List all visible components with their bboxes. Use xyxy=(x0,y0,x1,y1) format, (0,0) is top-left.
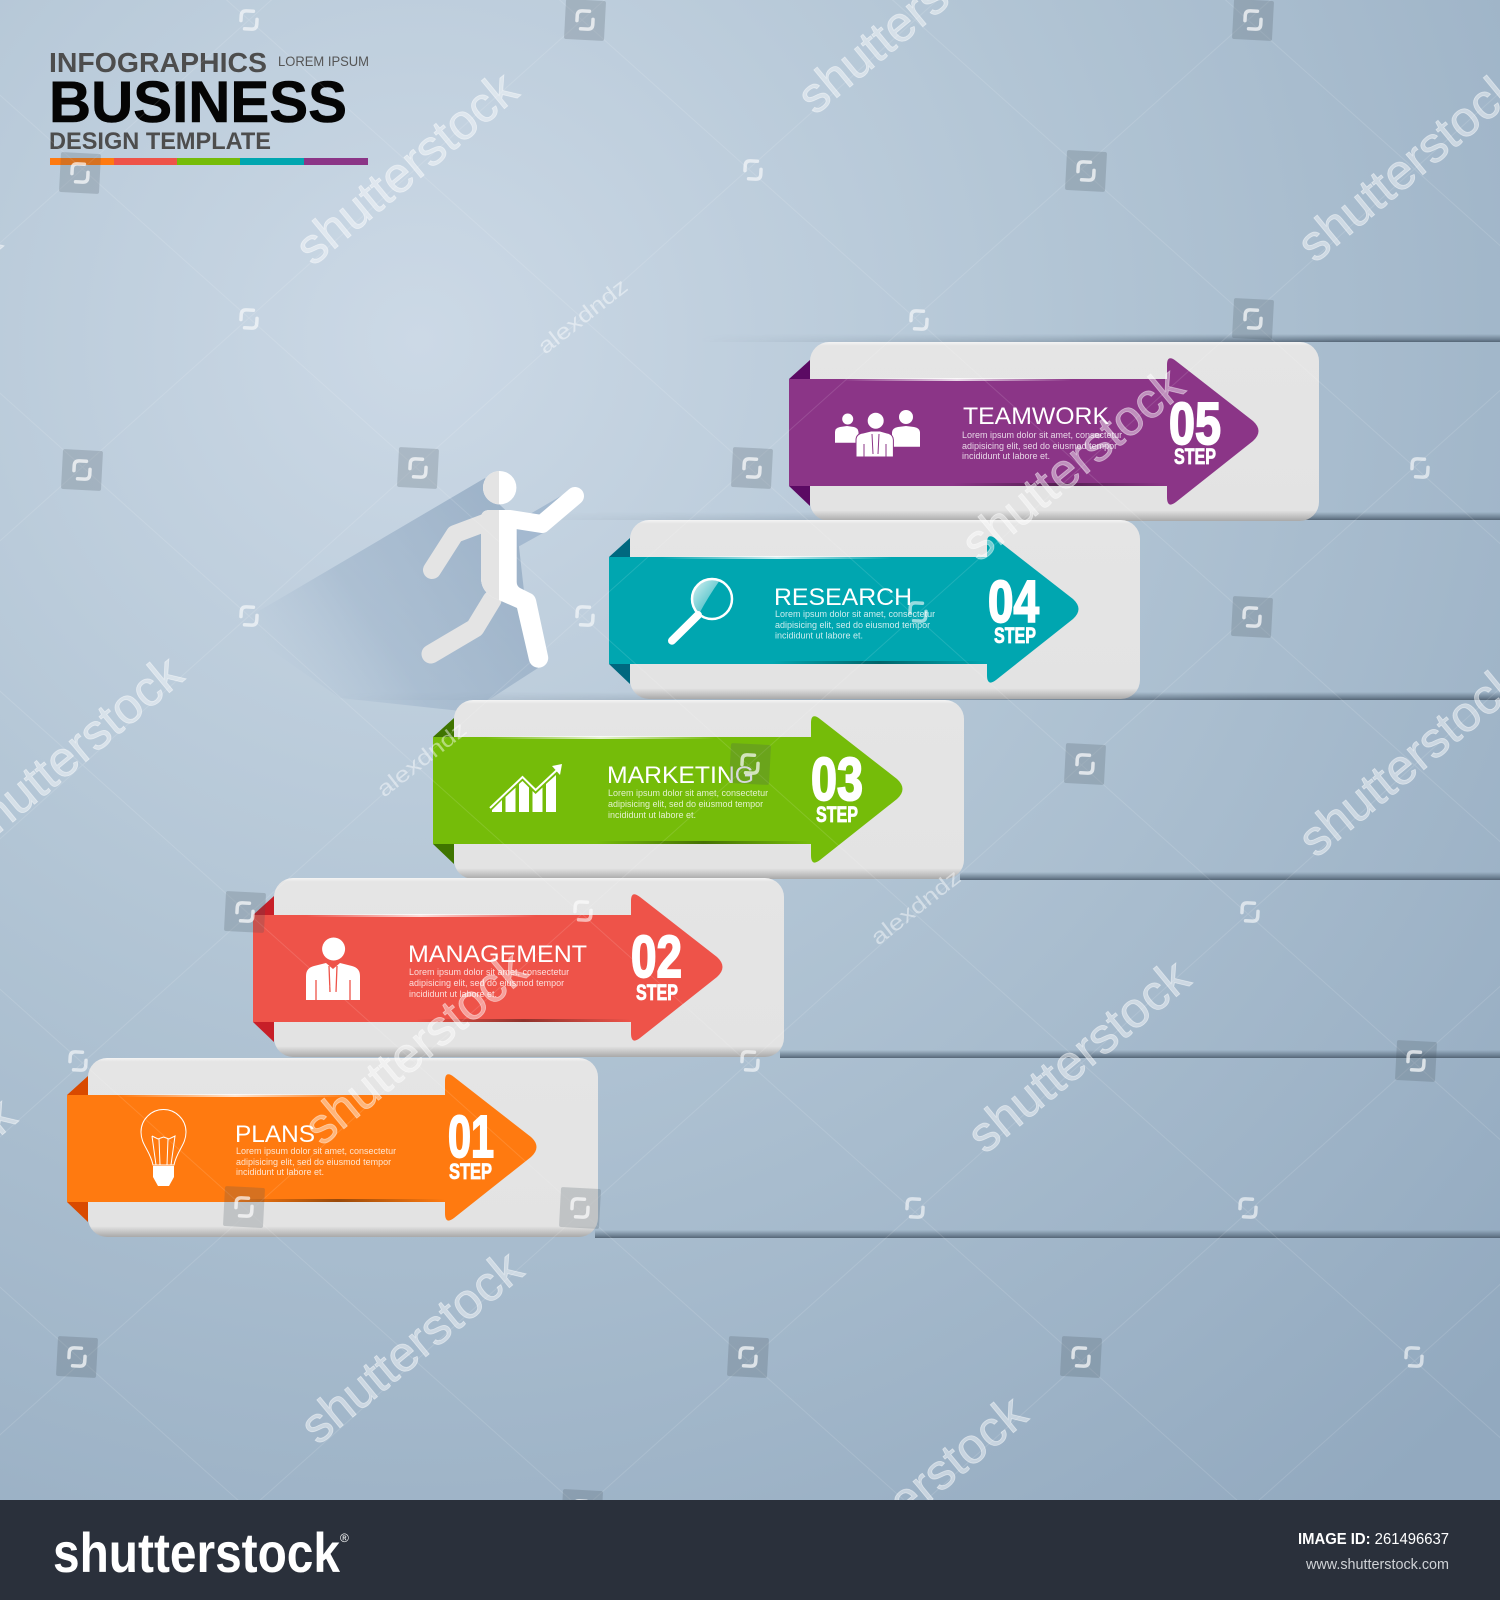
step 04 research xyxy=(609,520,1140,699)
colour bar xyxy=(50,158,368,165)
step label: STEP xyxy=(994,623,1036,648)
body text: incididunt ut labore et. xyxy=(608,810,696,820)
body text: Lorem ipsum dolor sit amet, consectetur xyxy=(962,430,1122,440)
title: PLANS xyxy=(235,1121,315,1148)
body text: Lorem ipsum dolor sit amet, consectetur xyxy=(775,609,935,619)
body text: incididunt ut labore et. xyxy=(236,1167,324,1177)
body text: Lorem ipsum dolor sit amet, consectetur xyxy=(236,1146,396,1156)
number: 05 xyxy=(1169,391,1221,457)
ribbon folds xyxy=(609,538,630,684)
header title block xyxy=(49,47,369,165)
number: 01 xyxy=(448,1104,494,1170)
step label: STEP xyxy=(816,802,858,827)
arrow xyxy=(67,1074,536,1221)
card xyxy=(274,878,784,1057)
body text: adipisicing elit, sed do eiusmod tempor xyxy=(775,620,930,630)
footer logo: shutterstock xyxy=(53,1521,341,1584)
watermark text: shutterstock xyxy=(793,1384,1038,1599)
card xyxy=(810,342,1319,521)
number: 03 xyxy=(811,746,863,813)
title: RESEARCH xyxy=(774,584,912,611)
ribbon folds xyxy=(789,360,810,506)
watermark text: shutterstock xyxy=(284,60,529,275)
card xyxy=(630,520,1140,699)
image id: IMAGE ID: 261496637 xyxy=(1298,1531,1449,1548)
arrow xyxy=(609,536,1078,683)
heading: business: BUSINESS xyxy=(49,70,347,135)
body text: Lorem ipsum dolor sit amet, consectetur xyxy=(409,967,569,977)
body text: adipisicing elit, sed do eiusmod tempor xyxy=(608,799,763,809)
title: MANAGEMENT xyxy=(408,941,587,968)
step label: STEP xyxy=(636,980,678,1005)
icon: manager xyxy=(306,938,360,1000)
icon: light bulb xyxy=(141,1110,186,1186)
body text: adipisicing elit, sed do eiusmod tempor xyxy=(409,978,564,988)
website: www.shutterstock.com xyxy=(1305,1556,1449,1573)
author watermark text xyxy=(372,273,965,950)
card xyxy=(88,1058,598,1237)
footer bar xyxy=(0,1500,1500,1600)
watermark text: shutterstock xyxy=(956,948,1201,1163)
ribbon folds xyxy=(253,896,274,1042)
step 03 marketing xyxy=(433,700,964,879)
number: 02 xyxy=(631,924,682,990)
body text: incididunt ut labore et. xyxy=(409,989,497,999)
watermark text: shutterstock xyxy=(950,356,1195,571)
author watermark text: alexdndz xyxy=(372,716,471,802)
author watermark text: alexdndz xyxy=(866,864,965,950)
body text: adipisicing elit, sed do eiusmod tempor xyxy=(962,441,1117,451)
icon: magnifier xyxy=(672,579,732,641)
step 02 management xyxy=(253,878,784,1057)
step 01 plans xyxy=(67,1058,598,1237)
watermark text: shutterstock xyxy=(289,1239,534,1454)
figure long shadow xyxy=(235,478,566,712)
heading: infographics: INFOGRAPHICS xyxy=(49,47,267,78)
ribbon folds xyxy=(67,1076,88,1222)
card xyxy=(454,700,964,879)
body text: Lorem ipsum dolor sit amet, consectetur xyxy=(608,788,768,798)
watermark bare hooks xyxy=(70,11,1428,1366)
title: TEAMWORK xyxy=(963,403,1109,430)
footer registered mark: ® xyxy=(340,1531,349,1545)
arrow xyxy=(789,358,1258,505)
number: 04 xyxy=(988,569,1039,635)
figure body xyxy=(431,471,575,668)
icon: growth chart xyxy=(490,764,562,812)
step label: STEP xyxy=(1174,444,1216,469)
ribbon folds xyxy=(433,718,454,864)
running figure xyxy=(288,471,584,710)
heading: design template: DESIGN TEMPLATE xyxy=(49,128,271,155)
arrow xyxy=(433,716,902,863)
watermark text: shutterstock xyxy=(293,940,538,1155)
heading: lorem ipsum: LOREM IPSUM xyxy=(278,53,369,69)
step 05 teamwork xyxy=(789,342,1319,521)
body text: incididunt ut labore et. xyxy=(962,451,1050,461)
stair shelf shadow lines xyxy=(489,334,1500,1238)
step label: STEP xyxy=(449,1159,492,1184)
body text: adipisicing elit, sed do eiusmod tempor xyxy=(236,1157,391,1167)
icon: team xyxy=(835,410,920,457)
title: MARKETING xyxy=(607,762,754,789)
arrow xyxy=(253,894,722,1041)
body text: incididunt ut labore et. xyxy=(775,630,863,640)
author watermark text: alexdndz xyxy=(533,273,632,359)
